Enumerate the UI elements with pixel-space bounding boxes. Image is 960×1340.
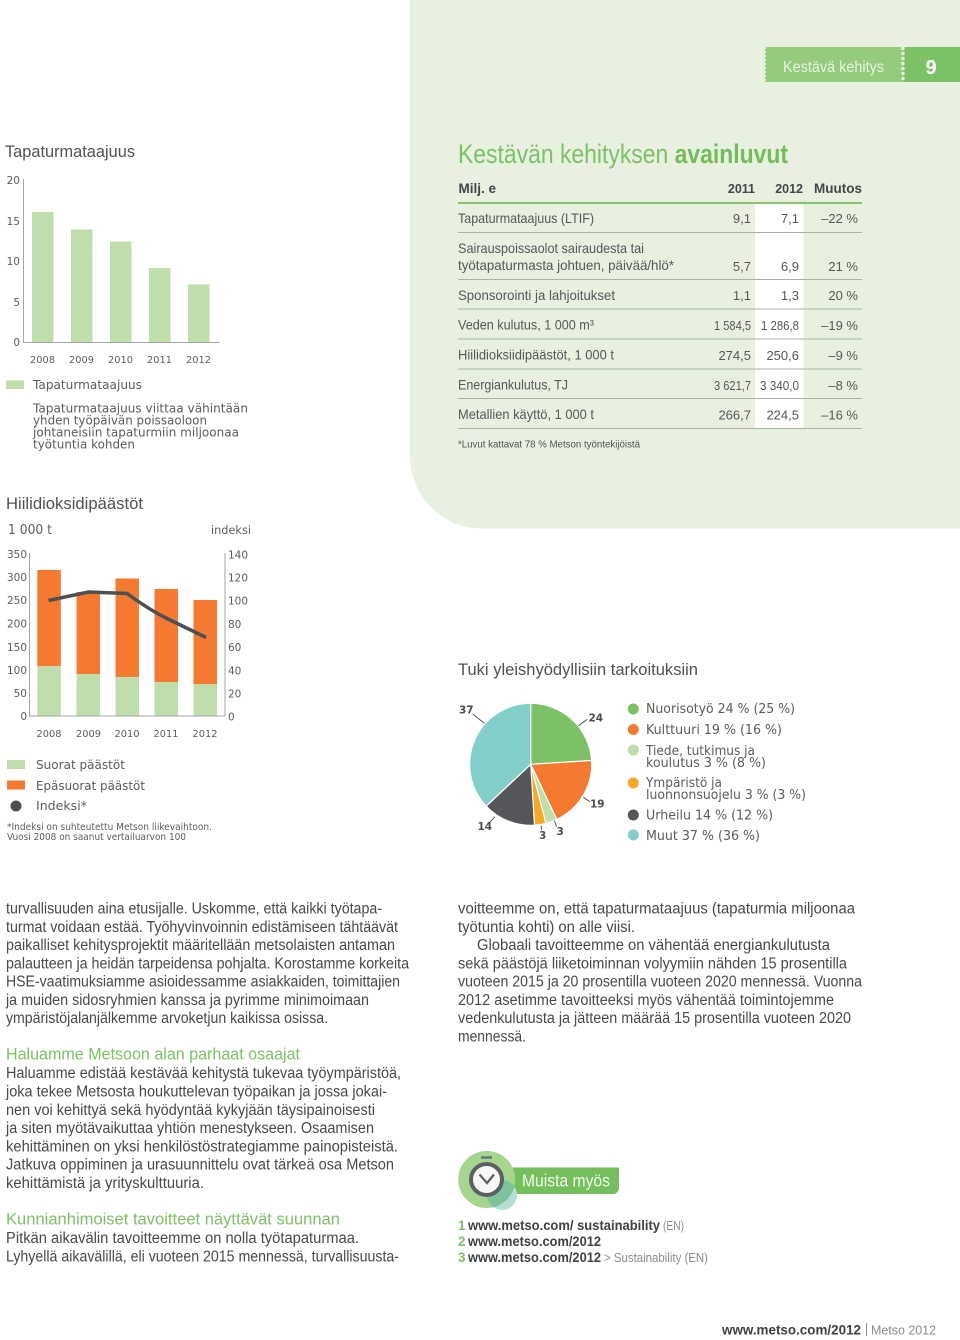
text block: left column talent	[5, 1065, 401, 1192]
stacked bar and line chart: CO2 emissions: 300	[7, 572, 27, 584]
heading: key figures title: Kestävän kehityksen avainluvut	[458, 139, 788, 169]
stacked bar and line chart: CO2 emissions: 20	[228, 688, 241, 700]
note: definition of accident frequency: yhden työpäivän poissaoloon	[33, 412, 207, 428]
table: key figures: 266,7	[718, 408, 751, 422]
table: key figures: 5,7	[733, 259, 751, 274]
table: key figures: Metallien käyttö, 1 000 t	[458, 406, 594, 422]
legend: donations	[628, 702, 806, 844]
text block: left column talent: nen voi kehittyä sekä hyödyntää kykyjään täysipainoisesti	[6, 1102, 375, 1119]
table: key figures: 2011	[728, 182, 755, 196]
table: key figures: –16 %	[821, 408, 858, 422]
stacked bar and line chart: CO2 emissions: 80	[228, 619, 241, 631]
table: key figures: 1 584,5	[714, 318, 751, 333]
stacked bar and line chart: CO2 emissions: 200	[7, 618, 27, 630]
text block: left column intro: ympäristöjalanjälkemme arvoketjun kaikissa osissa.	[6, 1010, 328, 1027]
table: key figures: 21 %	[828, 259, 858, 274]
stacked bar and line chart: CO2 emissions: 0	[228, 712, 235, 724]
text block: right column: sekä päästöjä liiketoiminnan volyymiin nähden 15 prosentilla	[458, 956, 847, 972]
panel: key figures background	[410, 0, 960, 528]
table: key figures: 2012	[775, 182, 803, 196]
stacked bar and line chart: CO2 emissions: 140	[228, 550, 248, 562]
table: key figures: Energiankulutus, TJ	[458, 376, 568, 392]
heading: Tapaturmataajuus: Tapaturmataajuus	[5, 142, 135, 161]
link list: www.metso.com/2012	[467, 1250, 601, 1265]
note: index explanation: *Indeksi on suhteutettu Metson liikevaihtoon.	[7, 822, 212, 833]
legend: CO2 emissions: Suorat päästöt	[36, 757, 125, 772]
footnote: key figures: *Luvut kattavat 78 % Metson työntekijöistä	[458, 440, 640, 450]
note: definition of accident frequency: työtuntia kohden	[33, 436, 135, 452]
text block: right column: voitteemme on, että tapaturmataajuus (tapaturmia miljoonaa	[458, 900, 855, 918]
link list	[458, 1218, 708, 1265]
table: key figures: 3 621,7	[714, 378, 751, 393]
text block: left column goals: Lyhyellä aikavälillä, eli vuoteen 2015 mennessä, turvallisuusta-	[6, 1248, 399, 1266]
pie chart: donations: 37	[459, 704, 474, 716]
legend: CO2 emissions: Epäsuorat päästöt	[36, 778, 145, 793]
subheading: Haluamme Metsoon alan parhaat osaajat: Haluamme Metsoon alan parhaat osaajat	[6, 1044, 300, 1064]
legend: donations: Nuorisotyö 24 % (25 %)	[646, 702, 795, 717]
stacked bar and line chart: CO2 emissions: 2010	[115, 729, 139, 740]
table: key figures: –19 %	[821, 318, 858, 333]
link list: > Sustainability (EN)	[604, 1250, 708, 1265]
bar chart: Tapaturmataajuus	[7, 175, 220, 366]
table: key figures: 20 %	[828, 288, 858, 303]
section tab: Kestävä kehitys page 9: Kestävä kehitys	[783, 59, 884, 76]
pie chart: donations: 14	[478, 821, 492, 833]
section tab: Kestävä kehitys page 9	[765, 47, 960, 82]
text block: left column goals	[6, 1230, 399, 1266]
note: definition of accident frequency: johtaneisiin tapaturmiin miljoonaa	[32, 424, 239, 440]
bar chart: Tapaturmataajuus: 2010	[108, 355, 133, 366]
legend: donations: Tiede, tutkimus ja	[645, 744, 755, 759]
stacked bar and line chart: CO2 emissions: 1 000 t	[8, 523, 52, 538]
stacked bar and line chart: CO2 emissions: 150	[7, 642, 27, 654]
stacked bar and line chart: CO2 emissions: 100	[7, 665, 27, 677]
pie chart: donations	[459, 703, 605, 842]
text block: left column intro: turvallisuuden aina etusijalle. Uskomme, että kaikki työtapa-	[6, 900, 382, 918]
legend: CO2 emissions: Indeksi*	[36, 798, 87, 813]
text block: right column: vuoteen 2015 ja 20 prosentilla vuoteen 2020 mennessä. Vuonna	[458, 974, 862, 990]
stacked bar and line chart: CO2 emissions: 60	[228, 642, 241, 654]
pie chart: donations: 19	[590, 798, 605, 810]
text block: left column talent: kehittäminen on yksi henkilöstöstrategiamme painopisteistä.	[6, 1138, 398, 1156]
legend: donations: Kulttuuri 19 % (16 %)	[646, 723, 782, 738]
text block: left column intro: HSE-vaatimuksiamme asioidessamme asiakkaiden, toimittajien	[6, 974, 400, 990]
table: key figures: 7,1	[781, 211, 799, 226]
bar chart: Tapaturmataajuus: 2011	[147, 355, 172, 366]
table: key figures: 1 286,8	[761, 318, 799, 333]
text block: right column: Globaali tavoitteemme on vähentää energiankulutusta	[477, 937, 830, 954]
text block: left column talent: kehittämistä ja yrityskulttuuria.	[6, 1175, 204, 1192]
text block: left column goals: Pitkän aikavälin tavoitteemme on nolla työtapaturmaa.	[6, 1230, 359, 1247]
text block: right column: mennessä.	[458, 1028, 526, 1046]
bar chart: Tapaturmataajuus: 15	[7, 216, 20, 228]
link list: 2	[458, 1234, 466, 1249]
link list: (EN)	[663, 1218, 684, 1233]
subheading: Kunnianhimoiset tavoitteet näyttävät suunnan: Kunnianhimoiset tavoitteet näyttävät suunnan	[6, 1210, 340, 1228]
pie chart: donations: 3	[539, 830, 546, 842]
text block: left column talent: ja siten myötävaikuttaa yhtiön menestykseen. Osaamisen	[5, 1120, 374, 1137]
table: key figures: 224,5	[766, 408, 799, 422]
bar chart: Tapaturmataajuus: 2009	[69, 355, 94, 366]
stacked bar and line chart: CO2 emissions: 250	[7, 595, 27, 607]
pie chart: donations: 24	[588, 712, 603, 724]
text block: left column intro: ja muiden sidosryhmien kanssa ja pyrimme minimoimaan	[5, 992, 369, 1009]
section tab: Kestävä kehitys page 9: 9	[925, 57, 937, 79]
table: key figures: 274,5	[718, 348, 751, 363]
note: index explanation	[7, 822, 212, 843]
table: key figures: Milj. e	[458, 181, 496, 196]
table: key figures: 3 340,0	[760, 378, 799, 393]
table: key figures: –8 %	[828, 378, 858, 393]
stacked bar and line chart: CO2 emissions	[7, 523, 251, 740]
text block: left column talent: Haluamme edistää kestävää kehitystä tukevaa työympäristöä,	[6, 1065, 401, 1082]
bar chart: Tapaturmataajuus: 2008	[30, 355, 55, 366]
note: definition of accident frequency	[32, 400, 248, 452]
bar chart: Tapaturmataajuus: 10	[7, 256, 20, 268]
table: key figures: 250,6	[766, 348, 799, 363]
stacked bar and line chart: CO2 emissions: 120	[228, 572, 248, 584]
note: definition of accident frequency: Tapaturmataajuus viittaa vähintään	[32, 400, 248, 416]
stacked bar and line chart: CO2 emissions: 350	[7, 549, 27, 561]
heading: Tuki yleishyödyllisiin tarkoituksiin: Tuki yleishyödyllisiin tarkoituksiin	[458, 660, 698, 679]
stacked bar and line chart: CO2 emissions: 2012	[193, 729, 217, 740]
text block: left column talent: Jatkuva oppiminen ja urasuunnittelu ovat tärkeä osa Metson	[6, 1156, 394, 1174]
footer	[721, 1322, 936, 1338]
stacked bar and line chart: CO2 emissions: 40	[228, 666, 241, 678]
legend: donations: koulutus 3 % (8 %)	[646, 756, 766, 771]
table: key figures: 1,1	[733, 288, 751, 303]
stacked bar and line chart: CO2 emissions: indeksi	[211, 523, 251, 537]
legend: CO2 emissions	[7, 757, 145, 813]
note: index explanation: Vuosi 2008 on saanut vertailuarvon 100	[7, 832, 186, 843]
text block: right column: 2012 asetimme tavoitteeksi myös vähentää toimintojemme	[458, 992, 834, 1009]
table: key figures: Veden kulutus, 1 000 m³	[458, 316, 594, 332]
table: key figures: työtapaturmasta johtuen, päivää/hlö*	[458, 257, 675, 273]
table: key figures: –9 %	[828, 348, 858, 363]
text block: left column intro: palautteen ja heidän tarpeidensa pohjalta. Korostamme korkeita	[6, 956, 409, 972]
link list: 1	[458, 1218, 466, 1233]
stacked bar and line chart: CO2 emissions: 2008	[37, 729, 61, 740]
icon: stopwatch with Muista myös tag: Muista myös	[522, 1170, 610, 1190]
link list: 3	[458, 1250, 466, 1265]
table: key figures: 1,3	[781, 288, 799, 303]
bar chart: Tapaturmataajuus: 2012	[186, 355, 211, 366]
table: key figures: 6,9	[781, 259, 799, 274]
legend: donations: Urheilu 14 % (12 %)	[646, 808, 773, 824]
link list: www.metso.com/ sustainability	[467, 1218, 660, 1233]
text block: right column: vedenkulutusta ja jätteen määrää 15 prosentilla vuoteen 2020	[458, 1010, 851, 1027]
legend: donations: luonnonsuojelu 3 % (3 %)	[646, 788, 806, 803]
stacked bar and line chart: CO2 emissions: 100	[228, 596, 248, 608]
table: key figures: Sponsorointi ja lahjoitukset	[458, 287, 615, 303]
table: key figures: –22 %	[821, 211, 858, 226]
text block: left column intro: turmat voidaan estää. Työhyvinvoinnin edistämiseen tähtäävät	[6, 919, 399, 936]
bar chart: Tapaturmataajuus: 0	[13, 337, 20, 349]
bar chart: Tapaturmataajuus: 5	[13, 297, 20, 309]
footer: www.metso.com/2012	[721, 1322, 861, 1338]
table: key figures: Muutos	[814, 181, 862, 196]
table: key figures	[458, 181, 862, 428]
text block: left column intro: paikalliset kehitysprojektit määritellään metsolaisten antaman	[6, 937, 395, 954]
text block: right column: työtuntia kohti) on alle viisi.	[458, 919, 635, 936]
table: key figures: Tapaturmataajuus (LTIF)	[458, 210, 594, 226]
link list: www.metso.com/2012	[467, 1234, 601, 1249]
bar chart: Tapaturmataajuus: 20	[7, 175, 20, 187]
legend: Tapaturmataajuus: Tapaturmataajuus	[32, 377, 142, 392]
heading: Hiilidioksidipäästöt: Hiilidioksidipäästöt	[6, 494, 143, 513]
pie chart: donations: 3	[556, 826, 564, 838]
table: key figures: Hiilidioksiidipäästöt, 1 000 t	[458, 346, 614, 362]
legend: donations: Ympäristö ja	[645, 776, 722, 791]
legend: donations: Muut 37 % (36 %)	[646, 829, 760, 844]
stacked bar and line chart: CO2 emissions: 2011	[154, 729, 178, 740]
table: key figures: Sairauspoissaolot sairaudesta tai	[458, 240, 644, 256]
footer: Metso 2012	[871, 1322, 936, 1338]
text block: left column talent: joka tekee Metsosta houkuttelevan työpaikan ja jossa jokai-	[5, 1084, 387, 1100]
table: key figures: 9,1	[733, 211, 751, 226]
text block: right column	[458, 900, 862, 1046]
stacked bar and line chart: CO2 emissions: 50	[14, 688, 27, 700]
stacked bar and line chart: CO2 emissions: 0	[20, 711, 27, 723]
text block: left column intro	[5, 900, 409, 1027]
stacked bar and line chart: CO2 emissions: 2009	[76, 729, 101, 740]
icon: stopwatch with Muista myös tag	[458, 1151, 619, 1210]
